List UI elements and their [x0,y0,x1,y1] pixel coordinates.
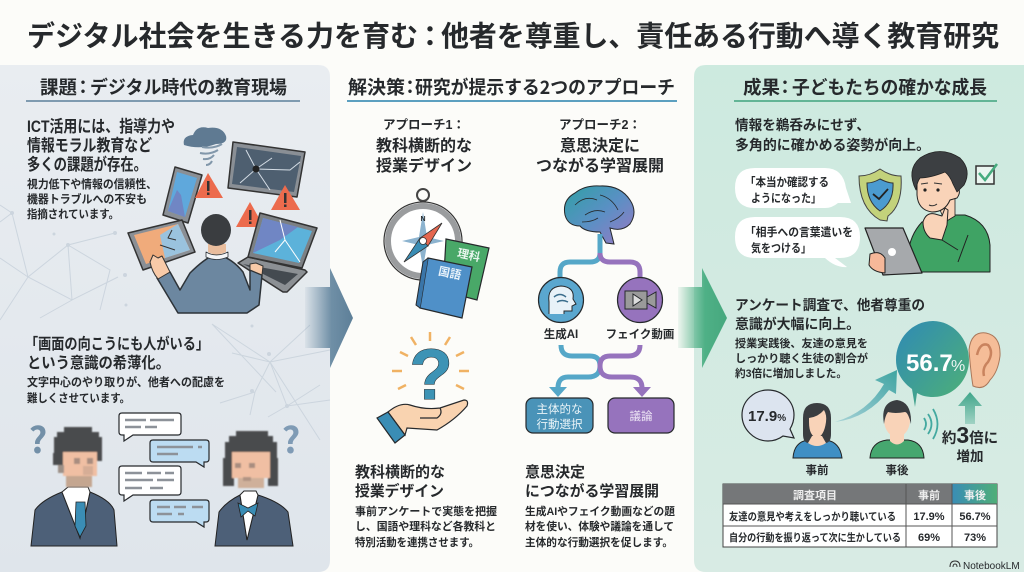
text block: approach 2 detail: 主体的な行動選択を促します。 [525,535,673,549]
text block: survey [735,297,925,380]
box: proactive choice: 主体的な [536,402,582,416]
icon: ear [969,333,1000,388]
table: survey results: 73% [964,532,986,544]
label: about 3 times: 増加 [956,448,984,464]
connector: brain to topics [560,234,640,280]
label: after: 事後 [886,463,909,477]
approach 2 heading: アプローチ2： [559,118,641,132]
speech bubble: language: 「相手への言葉遣いを [745,225,853,239]
icon: compass and books: 国語 [437,265,463,282]
chat bubbles [119,413,209,527]
speech bubble: confirm [735,168,851,208]
label: generative AI: 生成AI [544,327,578,341]
approach 1 heading: アプローチ1： [383,118,465,132]
box: discussion: 議論 [630,409,653,423]
heading: challenges [26,74,300,102]
text block: verification attitude [735,117,930,153]
speech bubble: confirm: ようになった」 [751,192,821,205]
text block: approach 1 detail: 授業デザイン [355,482,444,500]
text block: ICT issues: 指摘されています。 [27,207,119,221]
text block: survey: 約3倍に増加しました。 [735,366,847,380]
icon: warning triangles [195,173,300,227]
icon: question mark right: ? [282,412,300,464]
title [27,14,999,55]
title: ： [416,15,444,55]
label: about 3 times: 約3倍に [942,422,998,448]
text block: awareness: 「画面の向こうにも人がいる」 [25,334,209,353]
text block: survey: 意識が大幅に向上。 [735,316,860,332]
icon: question mark over hand: ? [409,336,453,415]
text block: awareness: 難しくさせています。 [27,391,130,405]
approach 2 heading [536,118,664,175]
illustration: student with pixelated face female [215,431,293,546]
heading: solutions: 解決策 [348,74,405,100]
icon: compass and books: 理科 [456,246,482,264]
text block: approach 1 detail [355,463,497,549]
logo: NotebookLM: NotebookLM [963,561,1020,572]
text block: approach 1 detail: 事前アンケートで実態を把握 [355,504,497,518]
icon: question mark over hand [377,332,469,443]
table: survey results: 事後 [964,488,986,502]
text block: verification attitude: 多角的に確かめる姿勢が向上。 [735,137,930,153]
box: proactive choice [526,398,593,433]
text block: ICT issues: 機器トラブルへの不安も [27,192,147,206]
table: survey results: 56.7% [959,511,991,523]
arrow: solutions to outcomes [678,268,727,368]
text block: verification attitude: 情報を鵜呑みにせず、 [735,117,870,133]
big bubble: 56.7%: % [951,358,965,375]
label: about 3 times [942,422,998,464]
icon: fake video [618,278,662,322]
illustration: student checking a tablet [865,152,990,275]
icon: checkbox [976,164,997,184]
big bubble: 56.7%: 56.7 [906,350,953,377]
small bubble: 17.9%: 17.9% [748,408,786,425]
heading: solutions: ： [401,74,419,100]
text block: approach 1 detail: し、国語や理科など各教科と [355,519,496,533]
person: after [870,400,924,458]
speech bubble: language [735,217,860,267]
big bubble: 56.7% [896,321,969,407]
title: デジタル社会を生きる力を育む [27,14,418,55]
label: before: 事前 [806,463,828,477]
icon: shield [859,169,901,221]
box: discussion [608,398,674,433]
text block: approach 2 detail: 意思決定 [525,463,585,481]
person: before [793,403,842,458]
icon: laptop [238,213,317,292]
illustration: person with broken devices [128,127,317,313]
table: survey results: 自分の行動を振り返って次に生かしている [729,531,901,544]
text block: approach 1 detail: 教科横断的な [355,463,445,481]
approach 1 heading: 授業デザイン [376,156,472,175]
text block: ICT issues: ICT活用には、指導力や [27,117,175,136]
approach 1 heading: 教科横断的な [376,136,472,155]
table: survey results: 調査項目 [793,488,837,502]
title: 他者を尊重し、責任ある行動へ導く教育研究 [441,14,999,55]
label: fake video: フェイク動画 [606,327,674,341]
icon: tablet orange [128,220,195,270]
speech bubble: confirm: 「本当か確認する [745,175,829,189]
icon: cracked phone [163,167,202,223]
text block: ICT issues: 多くの課題が存在。 [27,154,147,174]
text block: approach 2 detail: 材を使い、体験や議論を通して [525,519,674,533]
icon: question mark left: ? [29,412,47,464]
table: survey results: 17.9% [913,511,945,523]
illustration: student with pixelated face [31,427,117,546]
icon: sound waves [924,409,938,439]
table: survey results [723,484,997,547]
icon: storm cloud [184,127,226,165]
heading: outcomes: 子どもたちの確かな成長 [792,74,987,100]
table: survey results: 友達の意見や考えをしっかり聴いている [729,510,896,523]
text block: ICT issues: 視力低下や情報の信頼性、 [27,177,157,191]
text block: ICT issues: 情報モラル教育など [27,136,152,155]
icon: compass and books [384,189,489,318]
text block: awareness: という意識の希薄化。 [27,353,170,372]
curved arrow [835,370,897,422]
arrow: challenges to solutions [305,268,353,368]
icon: cracked tablet [228,142,305,197]
text block: approach 2 detail [525,463,675,549]
text block: survey: しっかり聴く生徒の割合が [735,351,868,365]
text block: approach 1 detail: 特別活動を連携させます。 [355,535,479,549]
table: survey results: 事前 [918,488,940,502]
arrow: up [958,392,982,424]
heading: challenges: デジタル時代の教育現場 [90,74,287,100]
text block: approach 2 detail: 生成AIやフェイク動画などの題 [525,504,675,518]
icon: brain [564,186,634,244]
text block: ICT issues [27,117,175,221]
text block: approach 2 detail: につながる学習展開 [525,482,659,500]
panel: challenges [0,65,330,572]
heading: challenges: ： [74,74,92,100]
approach 2 heading: つながる学習展開 [536,156,664,175]
speech bubble: language: 気をつける」 [751,241,811,255]
small bubble: 17.9% [742,390,794,441]
approach 2 heading: 意思決定に [560,137,640,155]
text block: survey: アンケート調査で、他者尊重の [735,297,925,313]
heading: solutions: 研究が提示する2つのアプローチ [415,74,675,100]
text block: awareness [25,334,225,405]
person from behind [150,214,263,313]
panel: outcomes [694,65,1024,572]
table: survey results: 69% [918,532,940,544]
heading: challenges: 課題 [40,74,77,100]
icon: compass and books: N [420,216,426,223]
heading: outcomes: ： [776,74,794,100]
box: proactive choice: 行動選択 [536,417,583,431]
icon: generative AI [538,278,584,322]
connector: topics to outcomes [549,345,651,397]
text block: awareness: 文字中心のやり取りが、他者への配慮を [27,375,225,389]
heading: outcomes: 成果 [743,74,780,100]
text block: survey: 授業実践後、友達の意見を [735,336,868,350]
approach 1 heading [376,118,472,175]
